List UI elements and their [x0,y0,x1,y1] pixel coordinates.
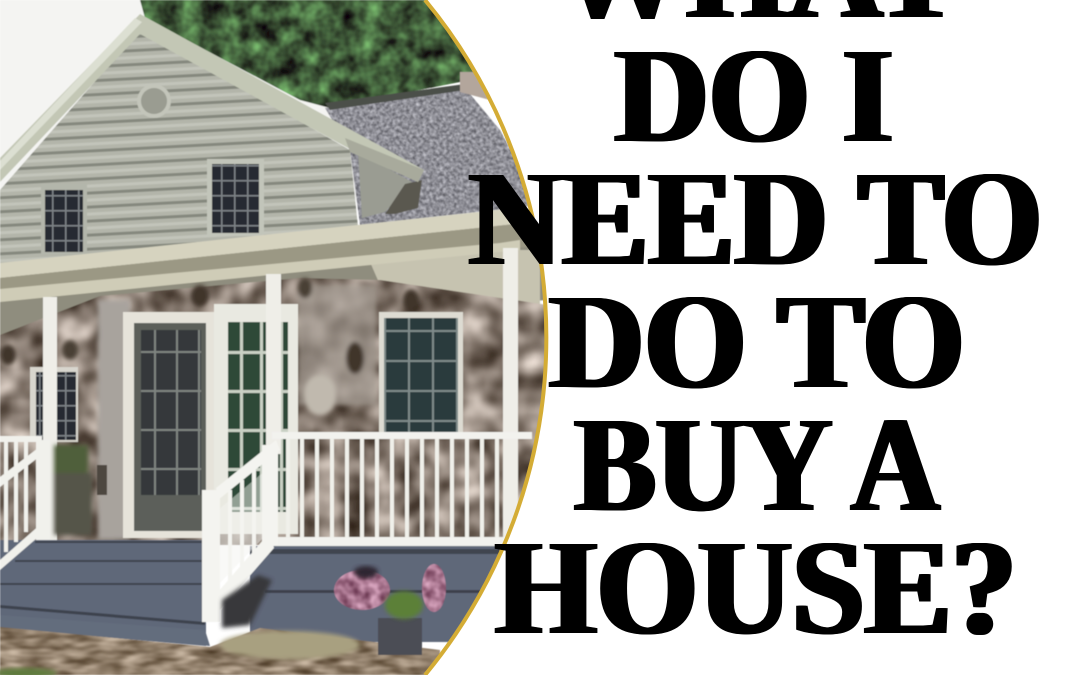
round vent [137,84,171,118]
flower pot [334,564,446,655]
dormer side [358,152,412,218]
door plaque [97,465,107,495]
title: DO TO [549,267,965,417]
trees [140,0,480,108]
ground [0,575,440,675]
large window [379,312,463,434]
stone pillars [0,278,419,540]
small left window [30,367,78,442]
upper right window [207,159,264,236]
gable trim [0,14,424,182]
upper left window [41,184,87,254]
gable siding [0,34,358,264]
side roof [325,88,540,225]
foundation [250,546,500,642]
right door [214,304,298,534]
stone wall [0,278,548,545]
plants by door [54,445,92,535]
title: BUY A [575,390,939,540]
title: HOUSE? [495,513,1017,663]
title: NEED TO [469,144,1042,294]
title [468,0,1042,663]
photo group [0,0,548,675]
sky [0,0,430,200]
right stair railing [202,440,280,622]
left side railing [0,435,44,570]
porch gutter and beam [0,207,535,278]
porch soffit [0,224,543,336]
roof ridge [325,84,465,110]
porch stairs [0,540,210,646]
porch columns [43,248,518,543]
chimney edge [460,72,490,100]
title: DO I [615,21,893,171]
left door [123,312,215,538]
gold circle border [425,0,546,675]
porch railing [272,432,532,546]
